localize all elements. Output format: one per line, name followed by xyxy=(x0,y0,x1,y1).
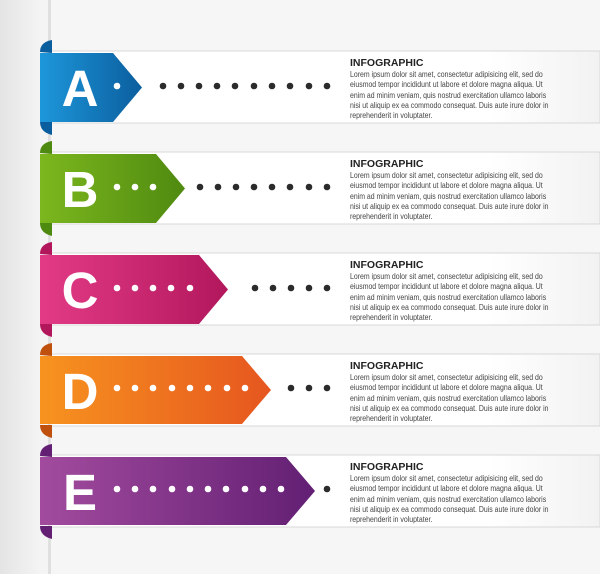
text E: nisi ut aliquip ex ea commodo consequat. Duis aute irure dolor in xyxy=(350,505,548,514)
row A: A xyxy=(62,60,98,117)
text D: eiusmod tempor incididunt ut labore et dolore magna aliqua. Ut xyxy=(350,383,543,392)
row E xyxy=(40,444,600,539)
row B xyxy=(40,141,600,236)
text E xyxy=(350,461,548,524)
row C xyxy=(40,242,600,337)
text C: enim ad minim veniam, quis nostrud exercitation ullamco laboris xyxy=(350,293,546,302)
text B: eiusmod tempor incididunt ut labore et dolore magna aliqua. Ut xyxy=(350,181,543,190)
text E: Lorem ipsum dolor sit amet, consectetur adipisicing elit, sed do xyxy=(350,474,543,483)
text E: enim ad minim veniam, quis nostrud exercitation ullamco laboris xyxy=(350,495,546,504)
text E: INFOGRAPHIC xyxy=(350,461,424,473)
row D xyxy=(40,343,600,438)
row E: E xyxy=(63,464,97,521)
text B: INFOGRAPHIC xyxy=(350,158,424,170)
text D xyxy=(350,360,548,423)
text A xyxy=(350,57,548,120)
text B: nisi ut aliquip ex ea commodo consequat. Duis aute irure dolor in xyxy=(350,202,548,211)
text B: enim ad minim veniam, quis nostrud exercitation ullamco laboris xyxy=(350,192,546,201)
row C: C xyxy=(62,262,98,319)
text E: eiusmod tempor incididunt ut labore et dolore magna aliqua. Ut xyxy=(350,484,543,493)
text C: INFOGRAPHIC xyxy=(350,259,424,271)
text A: INFOGRAPHIC xyxy=(350,57,424,69)
text B xyxy=(350,158,548,221)
row A xyxy=(40,40,600,135)
text C xyxy=(350,259,548,322)
text D: Lorem ipsum dolor sit amet, consectetur adipisicing elit, sed do xyxy=(350,373,543,382)
text D: INFOGRAPHIC xyxy=(350,360,424,372)
text C: nisi ut aliquip ex ea commodo consequat. Duis aute irure dolor in xyxy=(350,303,548,312)
text A: reprehenderit in voluptater. xyxy=(350,111,432,120)
text D: nisi ut aliquip ex ea commodo consequat. Duis aute irure dolor in xyxy=(350,404,548,413)
row D: D xyxy=(62,363,98,420)
text C: Lorem ipsum dolor sit amet, consectetur adipisicing elit, sed do xyxy=(350,272,543,281)
text D: enim ad minim veniam, quis nostrud exercitation ullamco laboris xyxy=(350,394,546,403)
text A: nisi ut aliquip ex ea commodo consequat. Duis aute irure dolor in xyxy=(350,101,548,110)
text B: reprehenderit in voluptater. xyxy=(350,212,432,221)
text C: eiusmod tempor incididunt ut labore et dolore magna aliqua. Ut xyxy=(350,282,543,291)
text A: Lorem ipsum dolor sit amet, consectetur adipisicing elit, sed do xyxy=(350,70,543,79)
text D: reprehenderit in voluptater. xyxy=(350,414,432,423)
text C: reprehenderit in voluptater. xyxy=(350,313,432,322)
text A: enim ad minim veniam, quis nostrud exercitation ullamco laboris xyxy=(350,91,546,100)
text E: reprehenderit in voluptater. xyxy=(350,515,432,524)
text B: Lorem ipsum dolor sit amet, consectetur adipisicing elit, sed do xyxy=(350,171,543,180)
row B: B xyxy=(62,161,98,218)
text A: eiusmod tempor incididunt ut labore et dolore magna aliqua. Ut xyxy=(350,80,543,89)
